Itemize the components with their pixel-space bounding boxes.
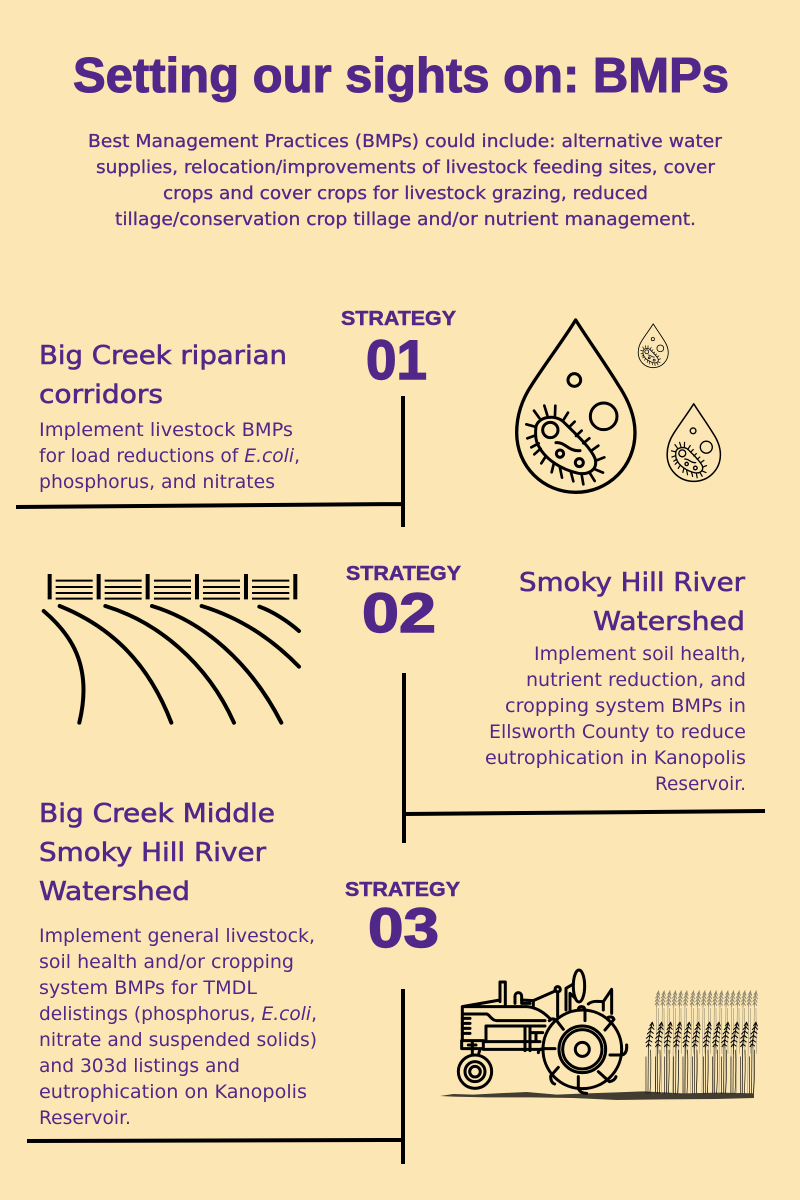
strategy 03 body text: system BMPs for TMDL [39, 977, 257, 999]
strategy 02 number: 02 [362, 581, 436, 644]
strategy 02 body text: eutrophication in Kanopolis [485, 747, 746, 769]
strategy 02 body text: Reservoir. [655, 773, 746, 795]
strategy 01 body text: Implement livestock BMPs [39, 419, 293, 441]
strategy 02 body text: cropping system BMPs in [505, 695, 746, 717]
strategy 03 heading: Watershed [39, 877, 190, 907]
icon: field rows [44, 574, 299, 723]
strategy 03 body text [39, 925, 317, 1129]
strategy 03 connector lines [27, 989, 403, 1164]
strategy 01 heading: Big Creek riparian [39, 341, 287, 371]
strategy 03 heading [39, 799, 275, 907]
soil strip [440, 1091, 754, 1100]
strategy 01 number: 01 [366, 328, 427, 391]
strategy 03 body text: Implement general livestock, [39, 925, 315, 947]
strategy 01 body text: phosphorus, and nitrates [39, 471, 275, 493]
panel: strategy 01 [16, 308, 720, 527]
strategy 02 heading: Watershed [593, 607, 745, 637]
strategy 03 number: 03 [368, 896, 439, 959]
strategy 01 body text [39, 419, 300, 493]
title: Setting our sights on: BMPs [73, 49, 729, 103]
strategy 03 heading: Smoky Hill River [39, 838, 266, 868]
tractor [458, 970, 627, 1093]
icon: water drops with bacteria [517, 320, 720, 492]
icon: tractor and wheat [440, 970, 758, 1100]
strategy 03 heading: Big Creek Middle [39, 799, 275, 829]
panel: strategy 03 [27, 799, 758, 1164]
strategy 01 connector lines [16, 396, 403, 527]
strategy 02 body text: Ellsworth County to reduce [489, 721, 746, 743]
strategy 03 body text: Reservoir. [39, 1107, 131, 1129]
strategy 01 heading: corridors [39, 380, 163, 410]
strategy 01 label: STRATEGY [341, 308, 457, 330]
strategy 02 heading: Smoky Hill River [519, 568, 745, 598]
strategy 02 connector lines [404, 673, 765, 843]
strategy 02 body text: nutrient reduction, and [526, 669, 746, 691]
strategy 03 body text: eutrophication on Kanopolis [39, 1081, 307, 1103]
intro text block: tillage/conservation crop tillage and/or nutrient management. [115, 209, 696, 230]
strategy 03 body text: soil health and/or cropping [39, 951, 294, 973]
strategy 03 body text: delistings (phosphorus, E.coli, [39, 1003, 317, 1025]
strategy 01 body text: for load reductions of E.coli, [39, 445, 300, 467]
panel: strategy 02 [44, 563, 765, 843]
strategy 03 label: STRATEGY [345, 879, 461, 901]
intro text block: crops and cover crops for livestock grazing, reduced [163, 183, 648, 204]
strategy 02 label: STRATEGY [346, 563, 462, 585]
wheat front row [646, 1022, 758, 1093]
intro text block: supplies, relocation/improvements of livestock feeding sites, cover [96, 157, 716, 178]
strategy 01 heading [39, 341, 287, 410]
wheat back row [655, 991, 757, 1093]
strategy 02 body text: Implement soil health, [534, 643, 746, 665]
strategy 02 heading [519, 568, 745, 637]
intro text block: Best Management Practices (BMPs) could include: alternative water [88, 131, 723, 152]
intro text block [88, 131, 723, 230]
strategy 02 body text [485, 643, 746, 795]
strategy 03 body text: and 303d listings and [39, 1055, 240, 1077]
strategy 03 body text: nitrate and suspended solids) [39, 1029, 317, 1051]
